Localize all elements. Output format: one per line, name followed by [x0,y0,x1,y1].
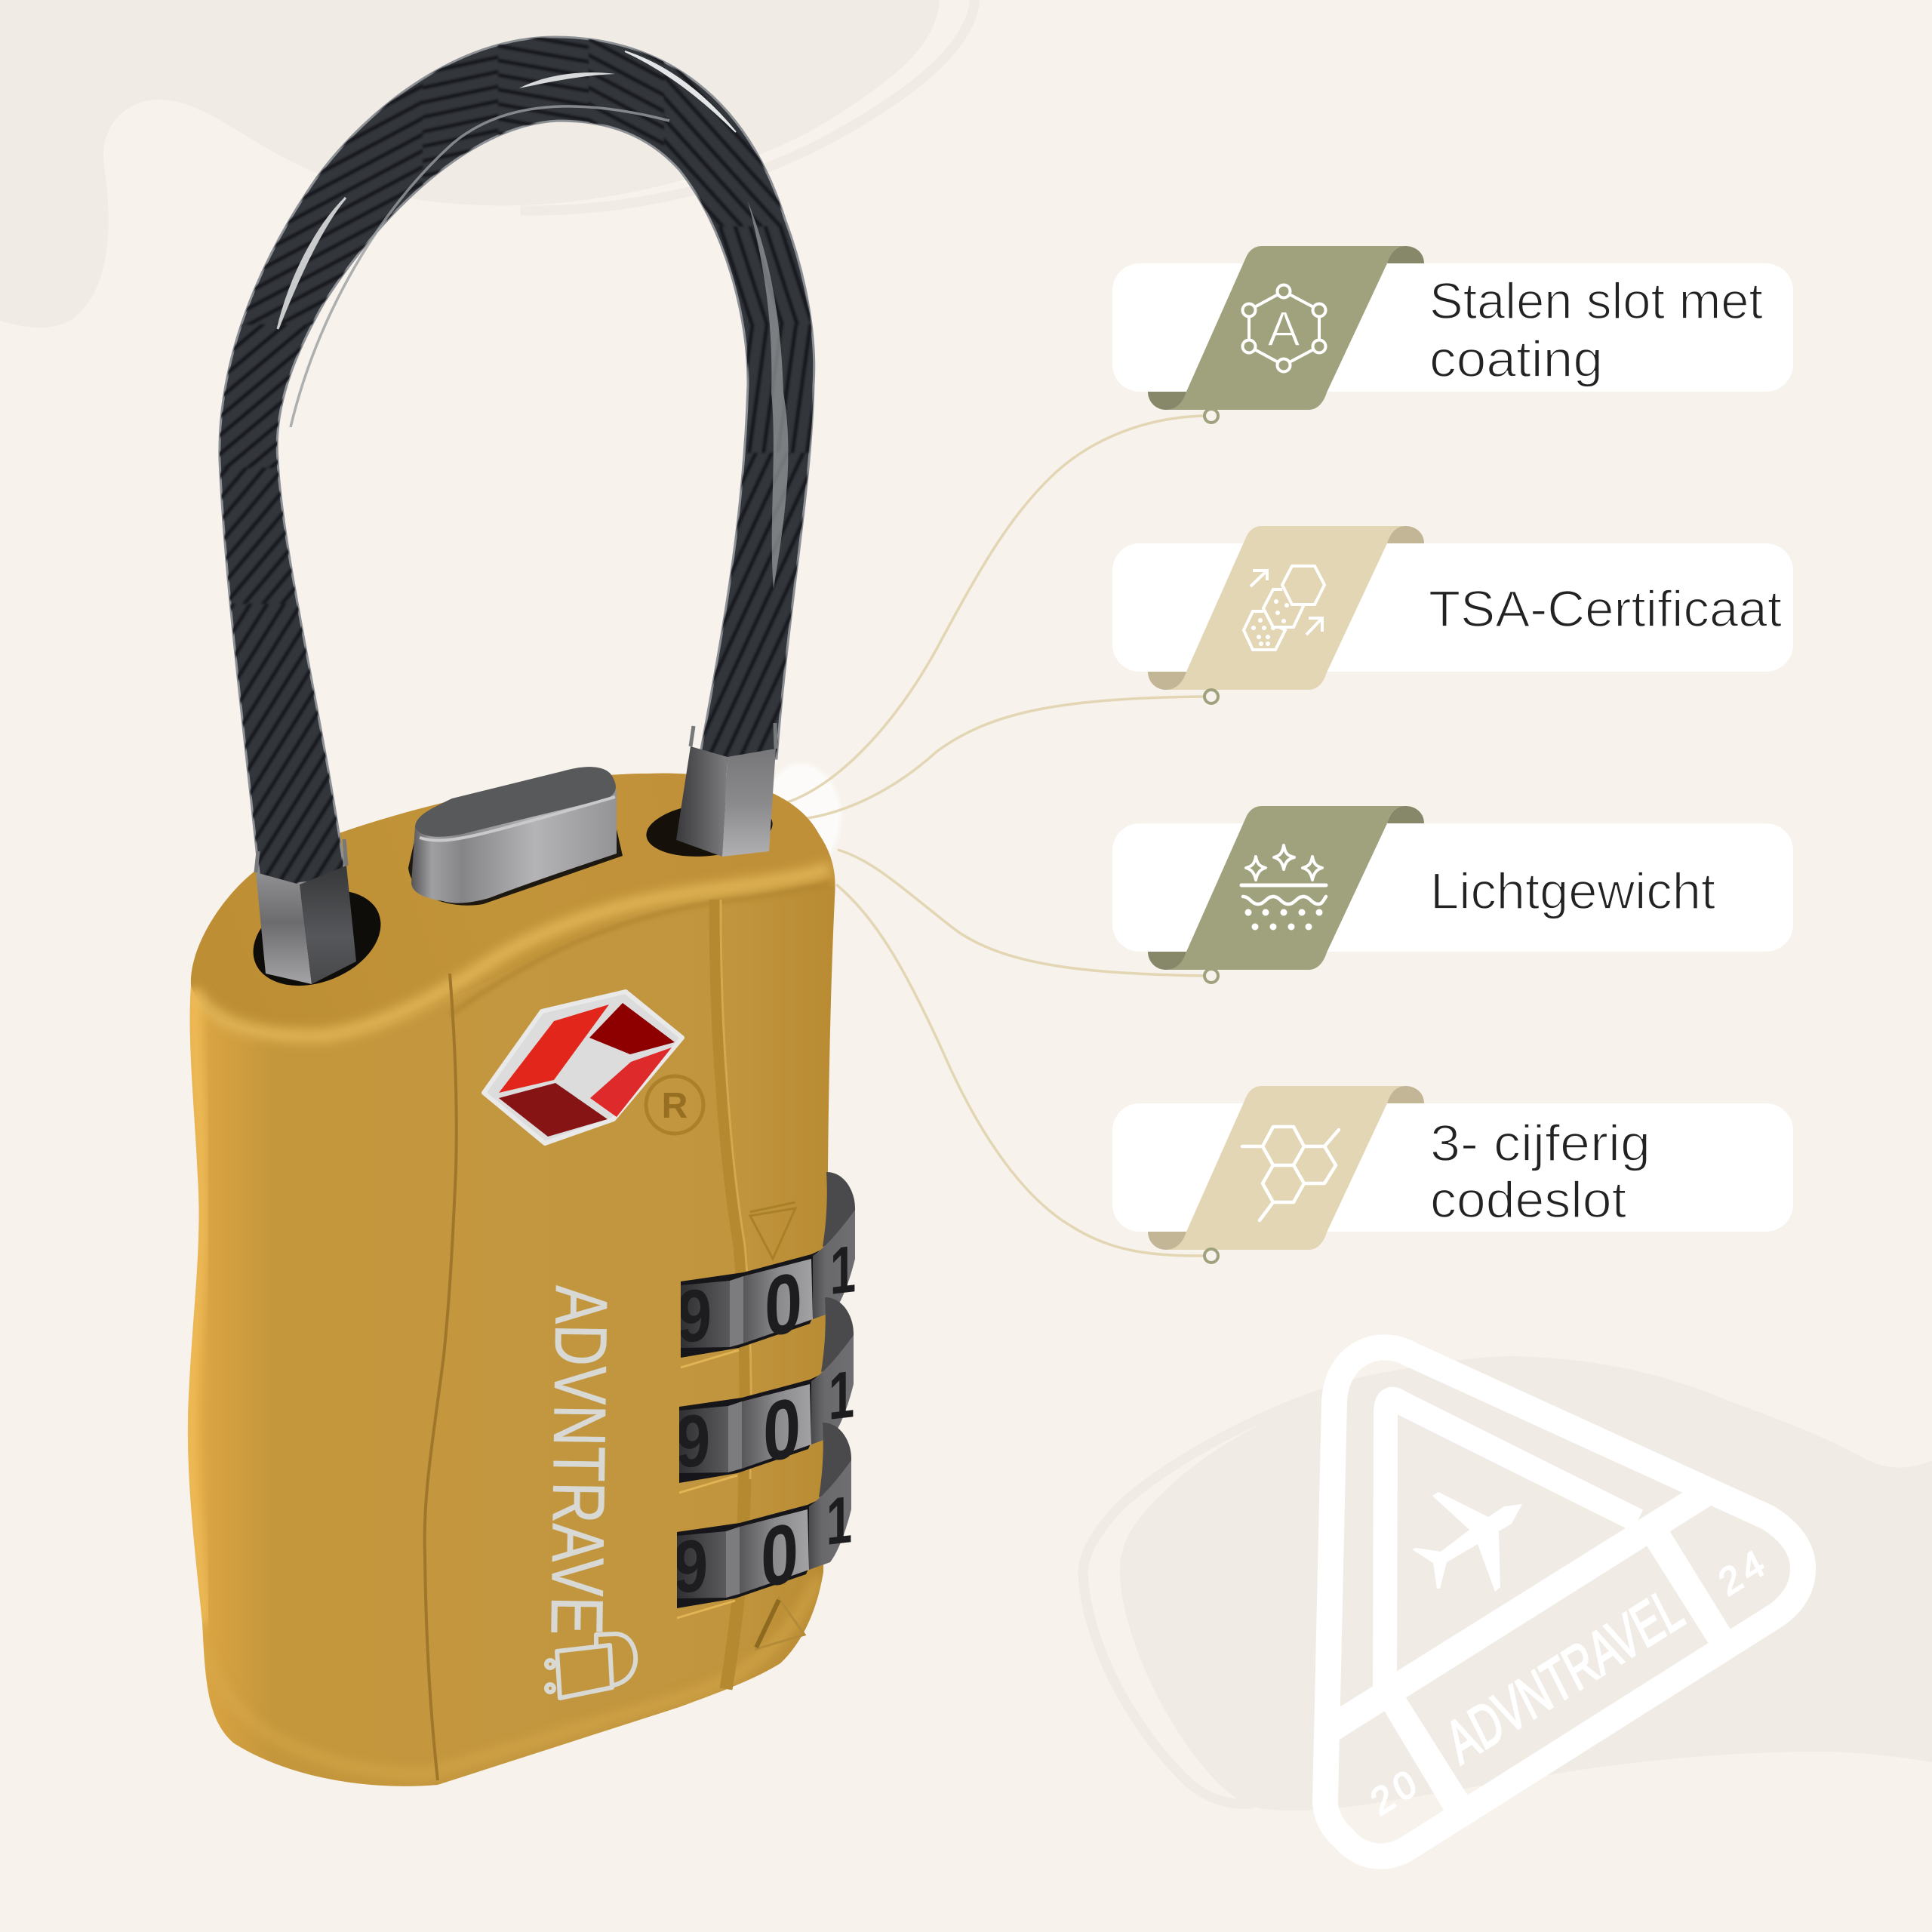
combination wheel 2: 0 [763,1378,801,1481]
card background [1112,543,1793,672]
release button [411,767,617,903]
top face [191,774,835,1037]
ribbon folds [1148,526,1424,690]
TSA logo [484,992,682,1143]
padlock [188,0,856,1786]
combination wheel 1 [677,1172,856,1367]
connector dot [1204,1249,1218,1263]
combination wheel 3 [673,1423,852,1618]
connector lines [777,416,1204,1256]
lower pointer triangle [756,1598,804,1649]
logo bright face [499,1004,609,1093]
icon: sparkles and layers [1241,845,1326,930]
panel seam left [425,974,457,1780]
upper pointer triangle [750,1202,795,1259]
registered mark [646,1076,703,1134]
icon: engraved suitcase [546,1634,635,1698]
background blob: top left [0,0,975,328]
icon: molecule A [1242,285,1325,371]
stamp outer frame [1325,1347,1803,1857]
card text: Stalen slot met [1429,272,1763,330]
ridge highlight [196,868,830,1035]
card text [1430,1115,1651,1229]
card text: Lichtgewicht [1430,863,1715,920]
cable shackle [218,36,815,884]
card text: codeslot [1430,1171,1626,1229]
feature card 4 [1112,1086,1793,1263]
ribbon [1166,1086,1405,1250]
combination wheel 2: 1 [829,1357,854,1435]
right ferrule [676,723,776,857]
right shackle hole [644,796,775,863]
connector dot [1204,409,1218,423]
ribbon [1166,806,1405,970]
background blob: bottom right [1083,1356,1932,1810]
button slot [408,823,623,906]
button cap [415,767,616,837]
card background [1112,1103,1793,1232]
card text: TSA-Certificaat [1429,580,1782,638]
card text [1429,272,1763,388]
combination wheel 3: 1 [826,1482,852,1560]
combination wheel 1: 9 [677,1274,712,1358]
stamp year 24: 24 [1712,1542,1770,1604]
ribbon folds [1148,246,1424,410]
icon: airplane [1412,1492,1522,1592]
cable highlights [519,72,615,88]
icon: honeycomb molecule [1242,1127,1339,1220]
combination wheel 1: 1 [830,1232,856,1309]
ribbon [1166,246,1405,410]
icon: hexagons with arrows [1244,566,1324,650]
lower edge shade [205,1577,819,1775]
feature card 3 [1112,806,1793,983]
connector dot [1204,690,1218,703]
brand stamp logo [1325,1347,1803,1857]
stamp inner triangle [1385,1399,1638,1687]
combination wheel 2 [675,1297,854,1493]
left shackle hole [239,872,395,1004]
left edge glow [191,989,205,1623]
logo dark top face [589,1003,675,1054]
ribbon folds [1148,1086,1424,1250]
cable stripes [219,37,814,884]
card text: 3- cijferig [1430,1115,1651,1172]
engraved brand text: ADVNTRAVE [536,1285,623,1635]
combination wheel 2: 9 [675,1399,710,1484]
lens highlight behind lock [762,764,841,869]
ridge shadow [450,883,830,1015]
card text: coating [1429,331,1603,388]
connector dot [1204,969,1218,983]
ribbon [1166,526,1405,690]
card background [1112,823,1793,952]
stamp cross bars [1383,1697,1469,1811]
left ferrule [256,839,356,984]
button side [411,789,617,903]
lock body [188,774,835,1786]
combination wheel 3: 0 [761,1503,798,1606]
combination wheel 1: 0 [764,1253,802,1355]
feature card 2 [1112,526,1793,703]
icon: molecule A: A [1267,301,1300,356]
card background [1112,263,1793,392]
logo right face [590,1048,672,1117]
logo dark lower face [499,1083,608,1137]
lock body shading [191,774,835,1775]
logo plate [484,992,682,1143]
panel groove right [715,900,746,1689]
registered mark: R [662,1086,688,1126]
ribbon folds [1148,806,1424,970]
stamp year 20: 20 [1364,1761,1423,1824]
combination wheel 3: 9 [673,1524,708,1609]
stamp brand text: ADVNTRAVEL [1436,1574,1693,1777]
feature card 1 [1112,246,1793,423]
stamp diagonal band [1336,1491,1715,1742]
